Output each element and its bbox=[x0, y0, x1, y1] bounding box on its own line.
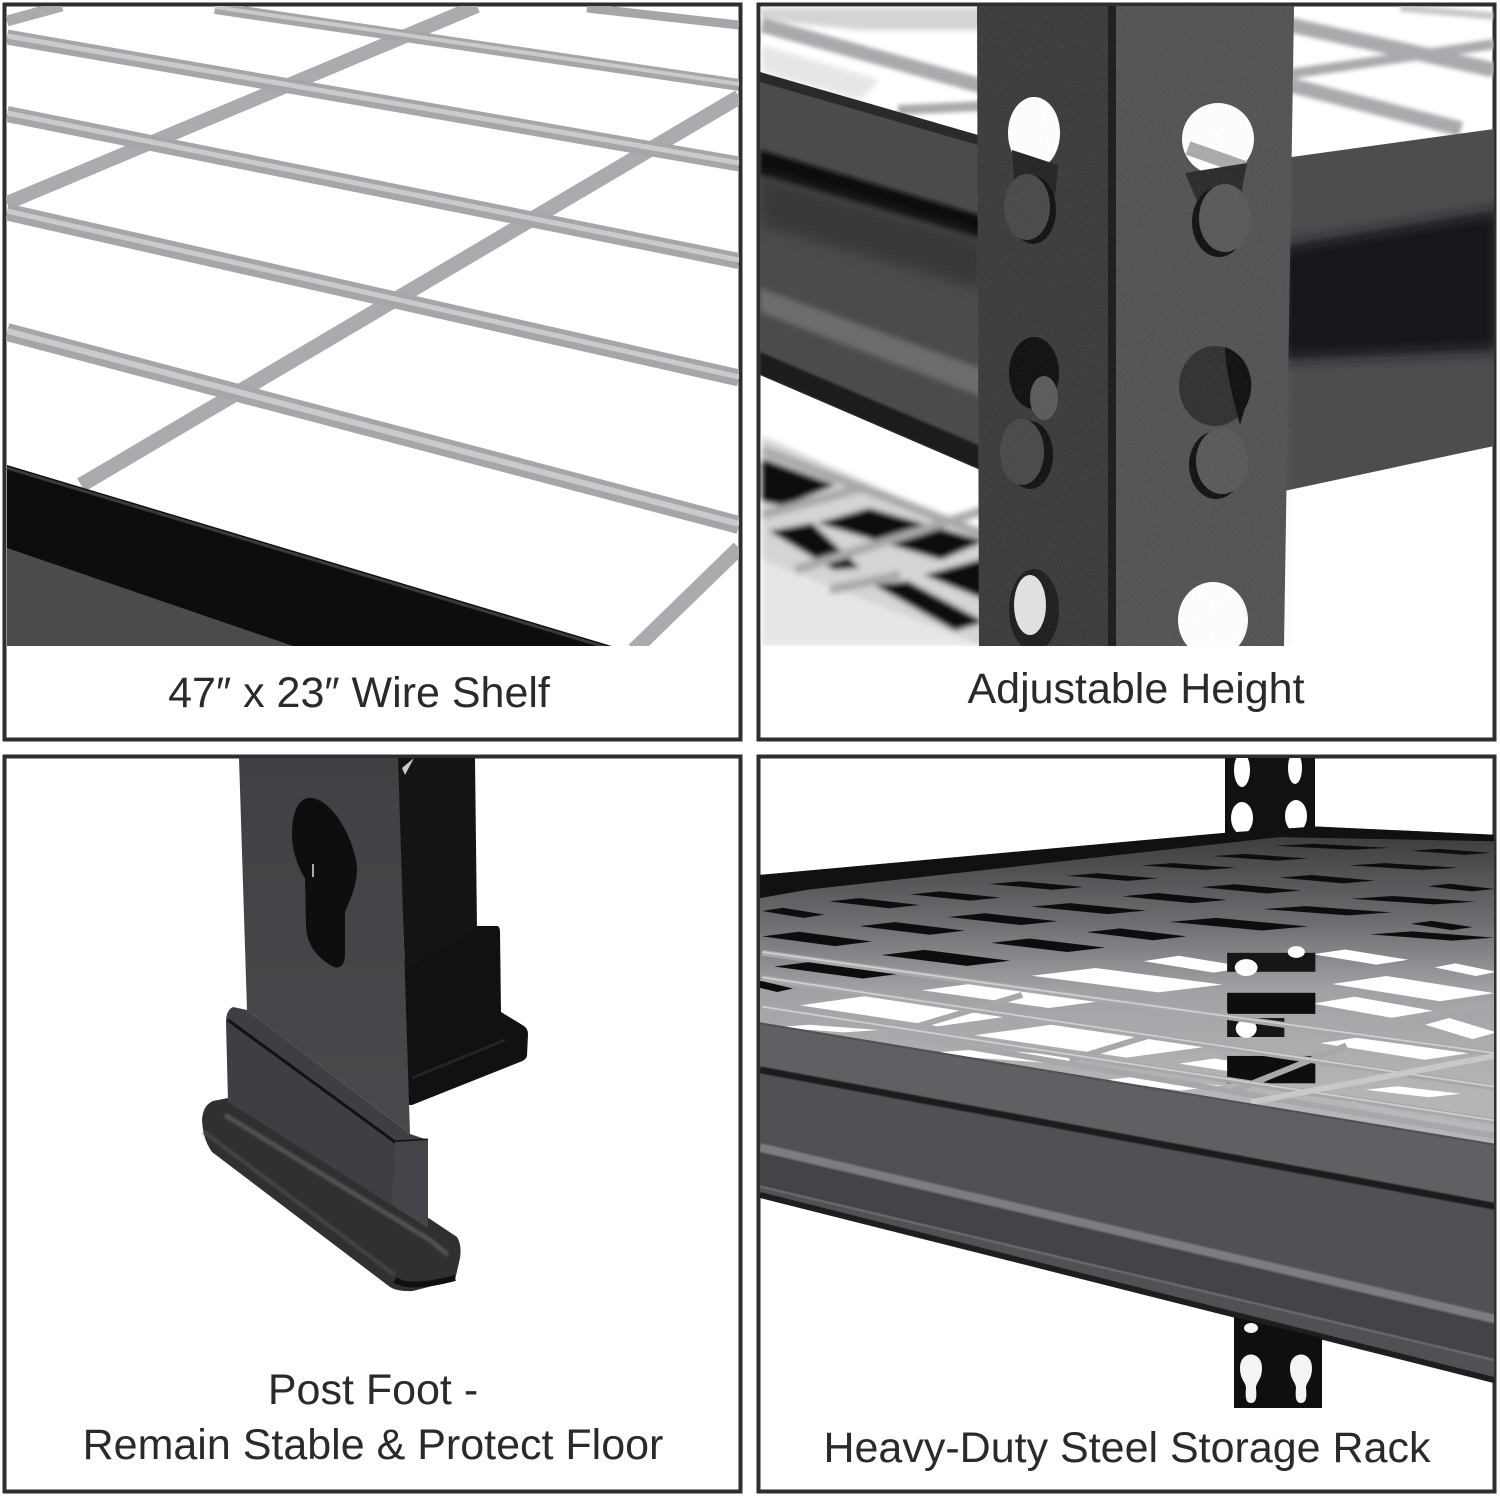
rear post bbox=[1225, 758, 1315, 833]
panel: wire shelf bbox=[4, 4, 740, 740]
photo: post and beam bbox=[760, 6, 1500, 658]
photo: wire shelf close-up bbox=[7, 6, 739, 650]
photo: rack shelf bbox=[745, 752, 1499, 1408]
caption: post foot: Remain Stable & Protect Floor bbox=[83, 1421, 663, 1469]
base plate bbox=[202, 1098, 461, 1291]
caption: steel storage rack: Heavy-Duty Steel Storage Rack bbox=[823, 1424, 1431, 1472]
photo: post foot bbox=[202, 758, 528, 1291]
blurred lower shelf bbox=[762, 436, 985, 646]
long round rods bbox=[7, 8, 739, 525]
mesh rods bbox=[762, 953, 1494, 1136]
left beam bbox=[760, 72, 978, 470]
front beam bbox=[760, 1022, 1499, 1382]
post seen through mesh bbox=[1227, 946, 1315, 1083]
panel: adjustable height bbox=[758, 4, 1500, 740]
background wires bbox=[760, 8, 985, 30]
caption: wire shelf: 47″ x 23″ Wire Shelf bbox=[168, 669, 551, 717]
caption: adjustable height: Adjustable Height bbox=[967, 665, 1305, 713]
caption: post foot bbox=[83, 1366, 663, 1469]
collar bbox=[226, 1007, 425, 1208]
holes and hooks bbox=[1000, 97, 1254, 658]
post front face bbox=[239, 758, 410, 1134]
keyhole bbox=[292, 798, 357, 968]
white mesh openings bbox=[774, 949, 1497, 1097]
mesh in zoom coordinates bbox=[745, 827, 1499, 1382]
post faces bbox=[977, 6, 1110, 646]
post grain overlay bbox=[977, 6, 1292, 646]
caption: post foot: Post Foot - bbox=[268, 1366, 478, 1414]
lower post bbox=[1234, 1317, 1322, 1408]
post texture bbox=[977, 6, 1294, 646]
black beam bbox=[7, 465, 615, 647]
panel: post foot bbox=[4, 756, 740, 1492]
flat cross wires bbox=[7, 6, 739, 650]
rear foot bbox=[400, 926, 528, 1105]
post side face bbox=[396, 758, 477, 970]
panel: steel storage rack bbox=[745, 752, 1499, 1492]
black mesh cells bbox=[745, 844, 1494, 992]
right beam bbox=[1286, 129, 1494, 490]
